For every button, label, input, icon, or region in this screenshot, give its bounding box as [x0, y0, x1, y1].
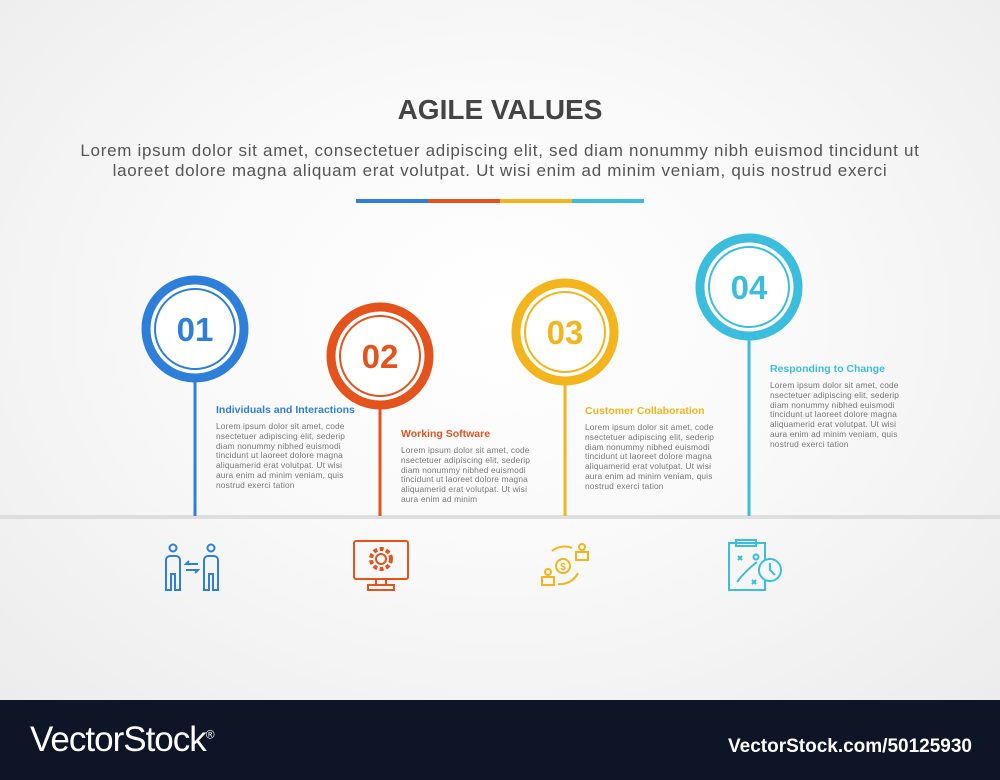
text block 03 [585, 405, 714, 490]
text block 04: nostrud exerci tation [770, 438, 849, 448]
step 02 marker [331, 307, 429, 516]
text block 03: aliquamerid erat volutpat. Ut wisi [585, 461, 711, 471]
text block 02: Working Software [401, 428, 490, 440]
baseline band [0, 515, 1000, 519]
icon: clipboard clock [729, 540, 781, 590]
text block 01: Lorem ipsum dolor sit amet, code [216, 421, 345, 431]
subtitle text: Lorem ipsum dolor sit amet, consectetuer adipiscing elit, sed diam nonummy nibh euismod tincidunt ut [80, 141, 920, 160]
text block 03: nsectetuer adipiscing elit, sederip [585, 432, 714, 442]
text block 02 [401, 428, 530, 504]
text block 01: nsectetuer adipiscing elit, sederip [216, 431, 345, 441]
text block 01 [216, 404, 355, 490]
icon: people exchange [166, 544, 218, 590]
step 01 marker [146, 280, 244, 516]
text block 03: Customer Collaboration [585, 405, 705, 417]
footer logo: VectorStock® [30, 720, 214, 759]
text block 03: nostrud exerci tation [585, 480, 664, 490]
step 03 marker: 03 [547, 314, 583, 351]
icon: monitor gear [354, 541, 408, 590]
title: AGILE VALUES [398, 94, 602, 125]
text block 04: aura enim ad minim veniam, quis [770, 429, 898, 439]
text block 02: Lorem ipsum dolor sit amet, code [401, 445, 530, 455]
text block 01: aliquamerid erat volutpat. Ut wisi [216, 460, 342, 470]
text block 02: diam nonummy nibhed euismodi [401, 464, 526, 474]
step 01 marker: 01 [177, 311, 213, 348]
text block 03: Lorem ipsum dolor sit amet, code [585, 422, 714, 432]
text block 04: aliquamerid erat volutpat. Ut wisi [770, 419, 896, 429]
subtitle text: laoreet dolore magna aliquam erat volutpat. Ut wisi enim ad minim veniam, quis nostrud exerci [113, 161, 887, 180]
icon: customer collaboration: $ [560, 562, 566, 573]
text block 01: aura enim ad minim veniam, quis [216, 470, 344, 480]
text block 04: nsectetuer adipiscing elit, sederip [770, 390, 899, 400]
icon: customer collaboration [542, 544, 588, 585]
text block 03: tincidunt ut laoreet dolore magna [585, 451, 712, 461]
text block 02: nsectetuer adipiscing elit, sederip [401, 455, 530, 465]
footer bar [0, 700, 1000, 780]
text block 02: tincidunt ut laoreet dolore magna [401, 474, 528, 484]
text block 02: aura enim ad minim [401, 494, 477, 504]
text block 03: diam nonummy nibhed euismodi [585, 442, 710, 452]
text block 04: diam nonummy nibhed euismodi [770, 400, 895, 410]
text block 01: Individuals and Interactions [216, 404, 355, 416]
text block 03: aura enim ad minim veniam, quis [585, 471, 713, 481]
subtitle text [80, 141, 920, 180]
text block 04 [770, 363, 899, 448]
step 02 marker: 02 [362, 338, 398, 375]
step 04 marker [700, 238, 798, 516]
text block 02: aliquamerid erat volutpat. Ut wisi [401, 484, 527, 494]
text block 01: nostrud exerci tation [216, 480, 295, 490]
text block 04: Responding to Change [770, 363, 885, 375]
text block 01: diam nonummy nibhed euismodi [216, 440, 341, 450]
text block 01: tincidunt ut laoreet dolore magna [216, 450, 343, 460]
text block 04: Lorem ipsum dolor sit amet, code [770, 380, 899, 390]
step 03 marker [516, 283, 614, 516]
text block 04: tincidunt ut laoreet dolore magna [770, 409, 897, 419]
color bar divider [356, 199, 644, 203]
footer url: VectorStock.com/50125930 [728, 736, 972, 757]
step 04 marker: 04 [731, 269, 768, 306]
